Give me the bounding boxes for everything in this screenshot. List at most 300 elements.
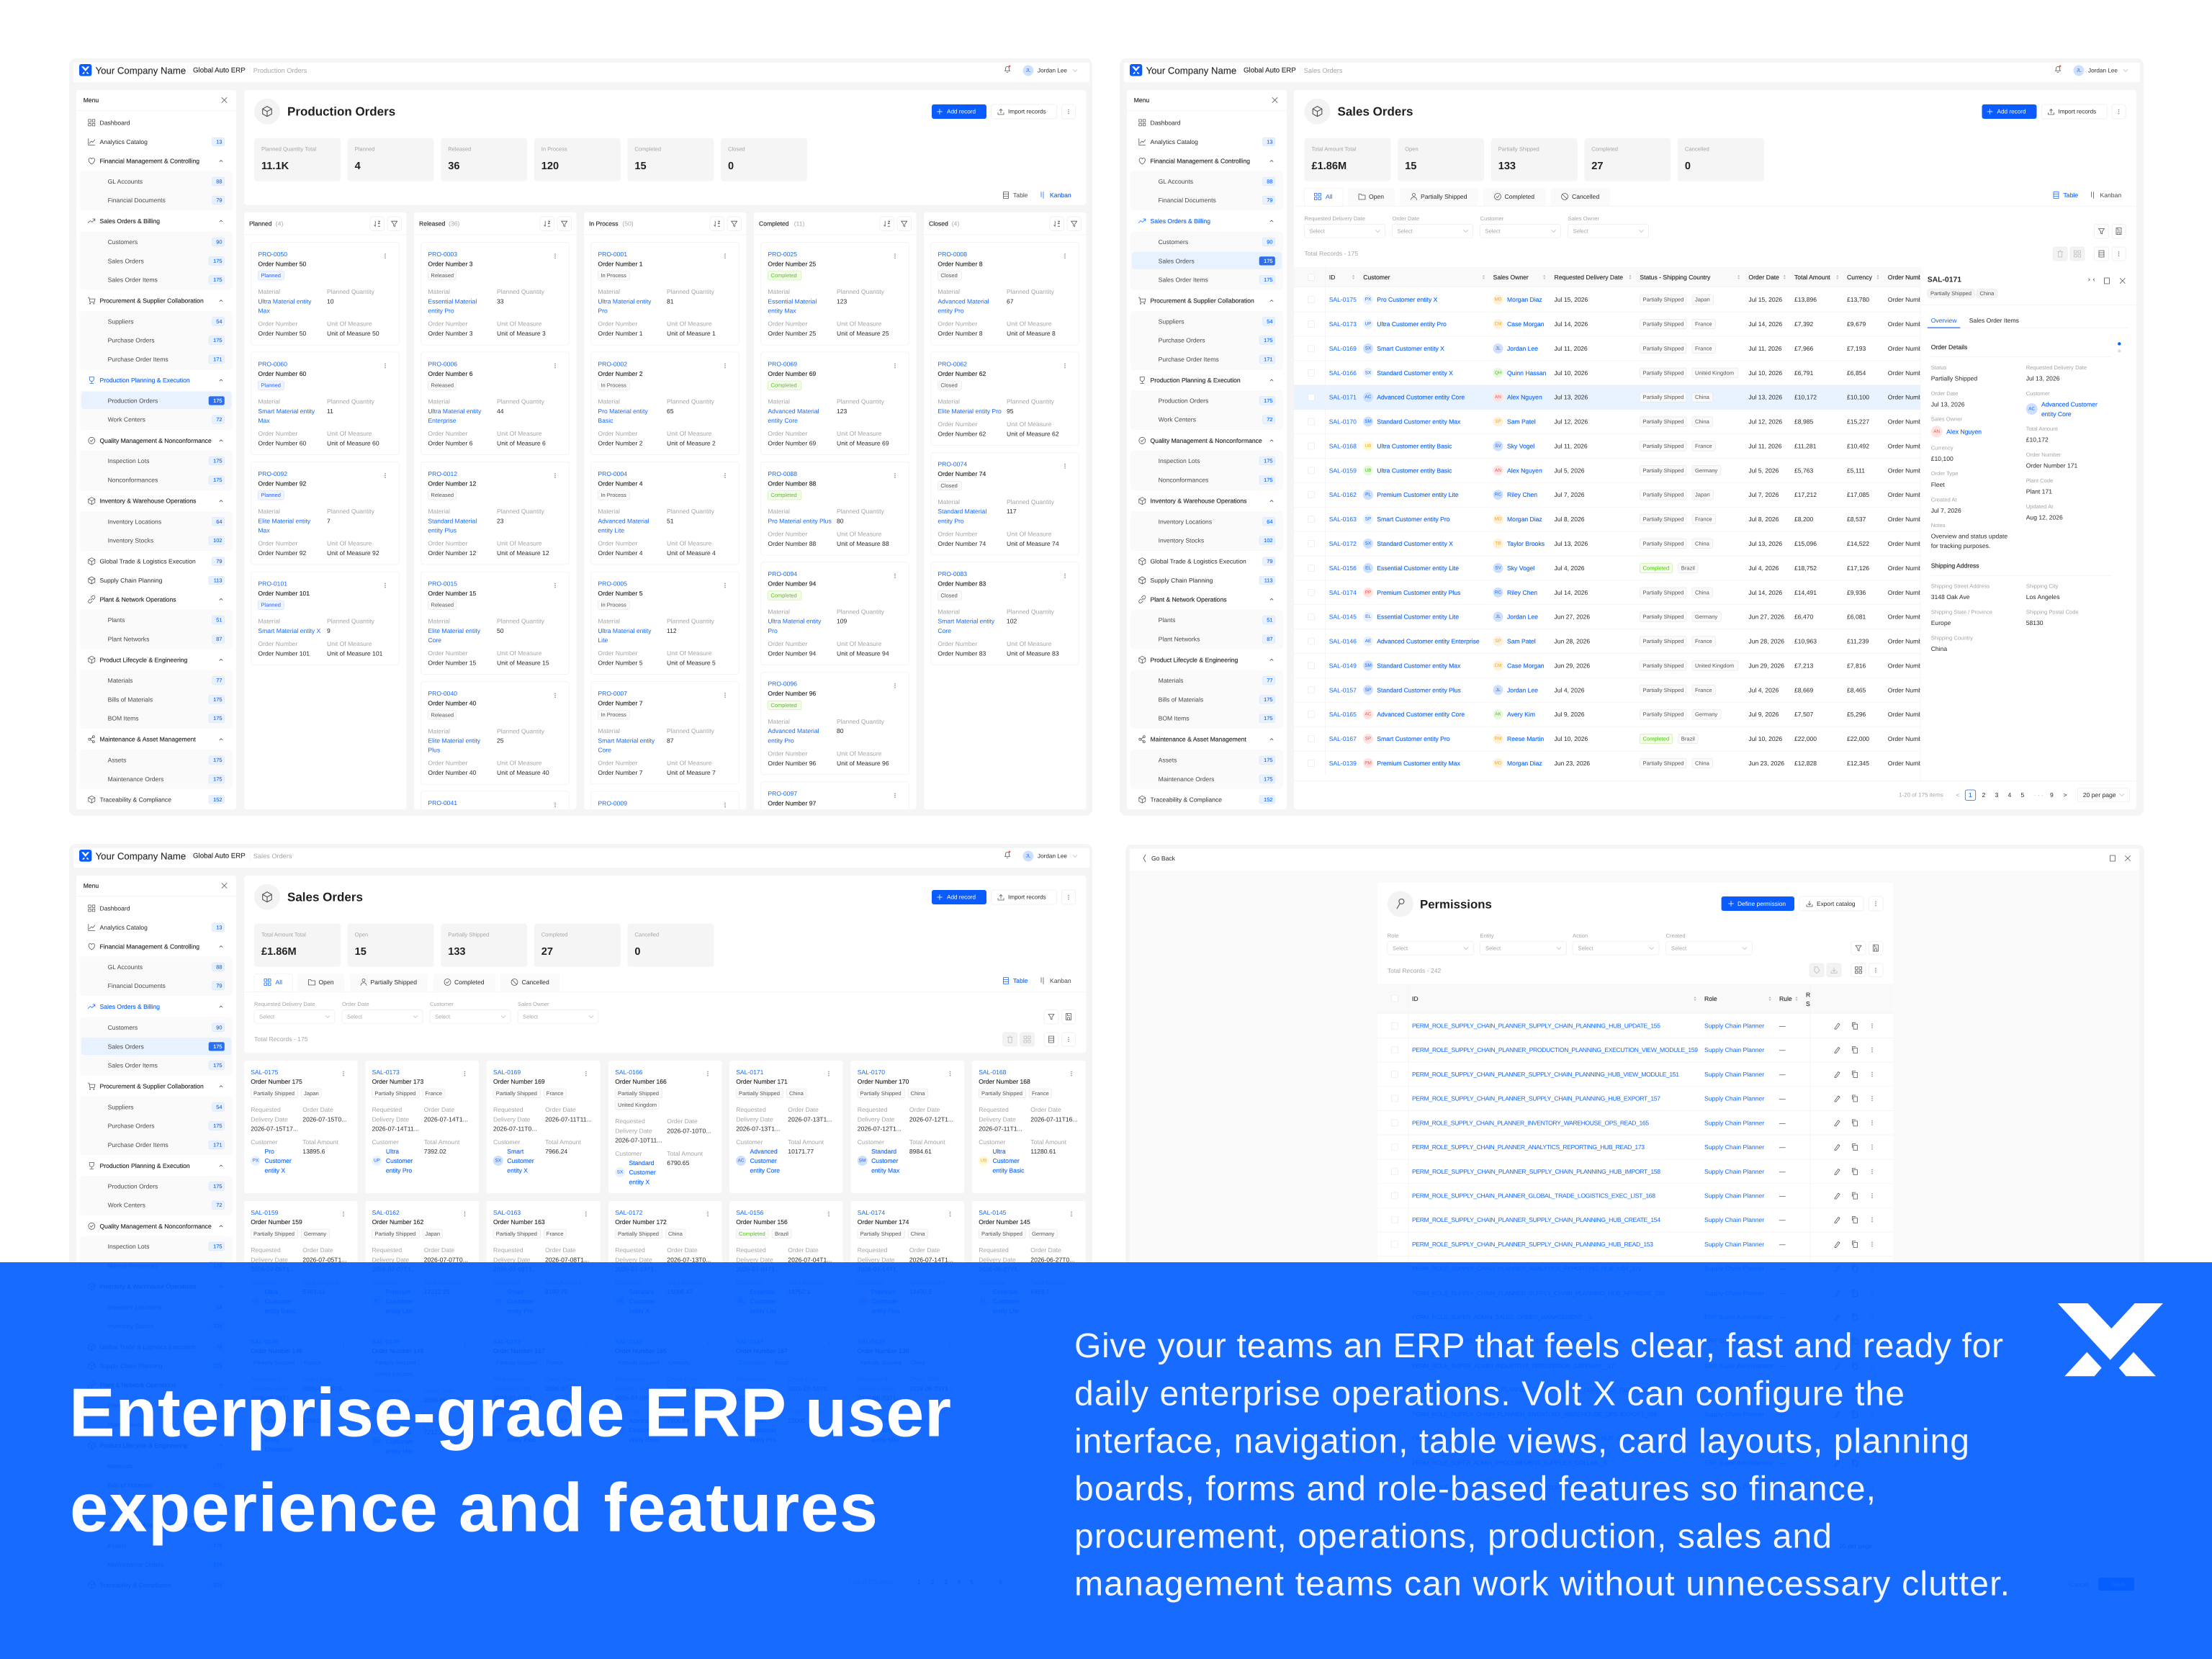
pagination: 5 [2020,791,2025,799]
table header: Customer [1363,274,1390,281]
row: SAL-0173 [1308,319,1940,329]
card: SAL-0173: entity Pro [386,1166,412,1174]
card: SAL-0173: Customer [386,1157,413,1164]
row: SAL-0166: Standard Customer entity X [1377,369,1453,377]
card: SAL-0168: Order Number 168 [979,1078,1030,1085]
card: PRO-0012: Planned Quantity [497,508,545,515]
KPI: Total Amount Total: Total Amount Total [261,931,306,938]
row: SAL-0145: Essential Customer entity Lite [1377,613,1459,621]
card: PRO-0004: In Process [601,492,626,498]
card: PRO-0083: Planned Quantity [1007,608,1055,615]
row: SAL-0174: Partially Shipped [1643,589,1683,595]
row: SAL-0163: Jul 8, 2026 [1554,516,1585,523]
card: SAL-0157: Order Date [545,1375,576,1382]
card: PRO-0083 [930,562,1079,665]
card: SAL-0172: SAL-0172 [615,1209,643,1216]
icon: key [1388,891,1413,917]
card: SAL-0166: 2026-07-10T11... [615,1137,662,1144]
row: SAL-0175: SAL-0175 [1329,296,1357,303]
table header: Status - Shipping Country [1640,274,1711,281]
pagination: · · · [2033,791,2044,799]
card: SAL-0162: Customer [386,1298,413,1305]
nav group: Inventory [80,1283,233,1336]
card: PRO-0088: Unit of Measure 88 [837,540,889,547]
card: PRO-0040: Order Number 40 [428,769,476,776]
row: permission 151: PERM_ROLE_SUPPLY_CHAIN_PLANNER_SUPPLY_CHAIN_PLANNING_HUB_VIEW_MODULE_151 [1412,1071,1679,1078]
row: permission 166: PERM_ROLE_SUPPLY_CHAIN_PLANNER_INVENTORY_WAREHOUSE_OPS_EXPORT_166 [1412,1411,1657,1418]
heading: Sales Orders [1338,105,1413,118]
top bar: Your Company Name [96,851,186,861]
card: PRO-0004: Advanced Material [598,517,649,524]
row: SAL-0166: SX [1365,370,1372,375]
card: SAL-0174: 14490.5 [909,1288,932,1295]
nav group: Sales Orders & Billing: 90 [216,238,222,245]
card: SAL-0162: Customer [372,1279,399,1286]
row: SAL-0156: Essential Customer entity Lite [1377,565,1459,572]
nav group: Procurement: Suppliers [108,1103,133,1110]
row: permission 166: Supply Chain Planner [1704,1411,1764,1418]
card: SAL-0170: Standard [871,1148,896,1155]
nav group: Quality: Inspection Lots [108,1243,149,1250]
card: SAL-0171: AC [738,1158,745,1164]
card: SAL-0174: Order Number 174 [858,1218,909,1226]
pagination [1721,1539,1877,1552]
card: PRO-0088: Unit Of Measure [837,530,882,537]
row: permission 8 [1412,1484,1873,1491]
actions [932,890,1076,904]
nav group: Product Lifecycle: 77 [216,677,222,684]
card: PRO-0001: Order Number [598,320,637,327]
row: SAL-0156: Brazil [1681,565,1695,571]
card: PRO-0092: Planned [261,492,281,498]
card: PRO-0060: Planned Quantity [327,398,375,405]
card: PRO-0005 [590,572,739,674]
row: permission 5 [1412,1460,1873,1467]
card: SAL-0149: entity Max [386,1447,415,1455]
nav: Analytics Catalog: Analytics Catalog [99,138,148,145]
card: PRO-0062: Closed [940,382,958,389]
pagination [1899,788,2129,802]
row: SAL-0157: Jordan Lee [1507,686,1538,693]
row: SAL-0167: Completed [1643,736,1669,742]
row: SAL-0170: Standard Customer entity Max [1377,418,1461,426]
view switch [1004,192,1071,199]
card: SAL-0165: Requested [615,1375,645,1382]
row: SAL-0149: Case Morgan [1507,662,1545,669]
row: permission 174 [1412,1434,1873,1442]
nav group: Financial Management: Financial Management & Controlling [99,943,199,950]
card: SAL-0173: Ultra [386,1148,399,1155]
KPI: In Process [534,138,621,181]
KPI: Cancelled [627,924,714,967]
record count and toolbar: Total Records - 175 [254,1035,308,1043]
card: SAL-0167: 2026-07-10T1... [736,1395,780,1402]
nav group: Procurement: Procurement & Supplier Collaboration [1151,297,1254,305]
card: PRO-0015: Order Number 15 [428,660,476,667]
row: SAL-0149: Partially Shipped [1643,662,1683,669]
filters: Order Date [1393,215,1419,222]
card: PRO-0012: Material [428,508,450,515]
card: PRO-0069: Planned Quantity [837,398,885,405]
card: SAL-0159: 2026-07-05T1... [302,1256,346,1263]
row: permission 166 [1412,1411,1873,1418]
row: permission 153: — [1779,1241,1786,1248]
row: permission 173 [1391,1143,1873,1151]
top bar [1124,63,2140,82]
card: PRO-0062: PRO-0062 [938,360,967,367]
card: SAL-0165: entity Core [629,1436,659,1443]
card: SAL-0159: 2026-07-05T1... [251,1266,295,1273]
row: SAL-0139: Partially Shipped [1643,760,1683,766]
row: SAL-0146: £11,239 [1847,638,1869,645]
row: SAL-0159: Partially Shipped [1643,467,1683,474]
row: SAL-0169: Jordan Lee [1507,345,1538,352]
row: SAL-0145: £6,470 [1794,613,1814,621]
row: SAL-0166: Jul 10, 2026 [1748,369,1782,377]
row: SAL-0168: Partially Shipped [1643,443,1683,449]
card: SAL-0170: Requested [858,1106,888,1113]
card: SAL-0156: Customer [736,1279,763,1286]
row: SAL-0167: Jul 10, 2026 [1554,735,1588,742]
row: permission 156: — [1779,1290,1786,1297]
app logo [79,64,91,76]
row: SAL-0174: SAL-0174 [1329,589,1357,596]
column header: Closed: Closed [929,220,948,228]
window frame [1125,845,2144,1602]
card: PRO-0096: Order Number 96 [768,760,816,767]
detail panel: SAL-0171: Status [1931,364,1946,371]
card: PRO-0001: Pro [598,307,608,314]
card: SAL-0156: Essential [750,1288,775,1295]
actions: Import records [1008,108,1046,115]
card: PRO-0008: Unit Of Measure [1007,320,1052,327]
nav group: Financial Management: 88 [216,963,222,971]
row: permission 156: PERM_ROLE_SUPPLY_CHAIN_PLANNER_SUPPLY_CHAIN_PLANNING_HUB_APPROVE_156 [1412,1290,1665,1297]
card: SAL-0172: China [668,1231,683,1237]
detail panel: SAL-0171: Shipping Postal Code [2026,609,2079,615]
row: SAL-0175: Japan [1695,297,1710,303]
row: SAL-0166: Quinn Hassan [1507,369,1547,377]
KPI: Completed: Completed [541,931,568,938]
card: SAL-0169: 2026-07-11T11... [545,1115,592,1123]
card: PRO-0101: Planned [261,602,281,608]
column header: Completed: Completed [759,220,789,228]
row: SAL-0173: UP [1365,322,1371,327]
card: SAL-0167: Completed [739,1359,765,1366]
card: SAL-0156 [729,1201,843,1322]
nav group: Procurement: 175 [213,337,222,343]
nav group: Maintenance: Maintenance & Asset Management [1151,736,1246,743]
nav group: Product Lifecycle [80,1442,233,1514]
card: PRO-0083: Order Number 83 [938,580,986,588]
card: PRO-0002 [590,352,739,455]
pagination: 5 [970,1578,974,1586]
card: SAL-0172: Total Amount [667,1279,703,1286]
card: PRO-0001: Ultra Material entity [598,297,652,305]
table header: Order Date [1748,274,1779,281]
card: PRO-0025: Order Number [768,320,807,327]
card: SAL-0166: Standard [629,1159,655,1166]
nav group: Financial Management: 79 [1267,197,1273,203]
row: SAL-0162: Partially Shipped [1643,492,1683,498]
row: permission 154: PERM_ROLE_SUPPLY_CHAIN_PLANNER_SUPPLY_CHAIN_PLANNING_HUB_CREATE_154 [1412,1216,1660,1223]
card: SAL-0168: UB [981,1158,986,1164]
nav: Traceability: Traceability & Compliance [99,796,171,803]
detail panel: SAL-0171: 3148 Oak Ave [1931,593,1970,601]
row: SAL-0171: AN [1495,395,1501,400]
pagination: 4 [2008,791,2012,799]
KPI: Cancelled: 0 [1685,161,1691,172]
detail panel: SAL-0171: SAL-0171 [1928,276,1961,284]
card: PRO-0001 [590,242,739,345]
card: SAL-0170: Partially Shipped [860,1090,902,1097]
card: SAL-0170: Customer [858,1138,884,1146]
card: PRO-0007: Order Number 7 [598,699,643,706]
row: SAL-0159: SAL-0159 [1329,467,1357,474]
card: PRO-0025: Material [768,288,790,295]
card: SAL-0162: SAL-0162 [372,1209,400,1216]
card: SAL-0163: Customer [507,1298,534,1305]
card: SAL-0173: Order Date [424,1106,454,1113]
detail panel: SAL-0171: £10,100 [1931,455,1954,462]
card: PRO-0062: Elite Material entity Pro [938,408,1002,415]
row: permission 157: PERM_ROLE_SUPPLY_CHAIN_PLANNER_SUPPLY_CHAIN_PLANNING_HUB_EXPORT_157 [1412,1094,1660,1102]
nav group: Quality: Quality Management & Nonconformance [99,1223,212,1230]
headline: Enterprise-grade ERP user [69,1375,951,1452]
row: SAL-0167: Brazil [1681,736,1695,742]
nav group: Plant: 87 [216,636,222,642]
row: SAL-0162: RC [1495,493,1501,498]
card: SAL-0157: Total Amount [545,1408,581,1415]
nav group: Procurement: Purchase Orders [1159,337,1205,344]
nav group: Production Planning (active): Production Planning & Execution [99,377,190,384]
card: SAL-0175: SAL-0175 [251,1069,279,1076]
card: SAL-0145: entity Lite [992,1307,1020,1314]
nav group: Financial Management: Financial Management & Controlling [99,157,199,164]
detail panel: SAL-0171: Order Details [1931,343,1967,351]
status tabs: Cancelled [1572,193,1599,200]
row: SAL-0170: Jul 12, 2026 [1748,418,1782,426]
record count and toolbar [1305,247,2126,261]
column panels [244,212,1086,809]
card: SAL-0171: Customer [736,1138,763,1146]
row: SAL-0163: Morgan Diaz [1507,516,1542,523]
row: permission 172: — [1779,1265,1786,1272]
card: PRO-0003: Planned Quantity [497,288,545,295]
card: SAL-0172: SX [617,1299,624,1303]
detail panel: SAL-0171: China [1980,290,1995,297]
nav group: Plant [80,595,233,649]
table header: Requested Delivery Date [1554,274,1623,281]
row: SAL-0145: £6,081 [1847,613,1866,621]
row: SAL-0174: Jul 14, 2026 [1554,589,1588,596]
card: SAL-0172: Delivery Date [615,1256,652,1263]
row: permission 154: — [1779,1216,1786,1223]
body copy: interface, navigation, table views, card layouts, planning [1074,1422,1969,1460]
pagination: < [1956,791,1960,799]
nav: Supply Chain Planning [89,576,225,585]
KPI: Total Amount Total: £1.86M [1312,161,1346,172]
row: SAL-0149: SM [1364,663,1372,668]
sidebar navigation: Menu [1134,96,1149,104]
column header: Completed: (11) [794,220,804,228]
card: SAL-0171 [729,1061,843,1193]
nav group: Production Planning: Production Planning & Execution [99,1162,190,1169]
filters [254,1001,1076,1024]
card: SAL-0168: France [1032,1090,1049,1097]
card: SAL-0172 [608,1201,722,1322]
card: PRO-0015: Released [431,602,454,608]
card: SAL-0170: Delivery Date [858,1115,895,1123]
card: PRO-0012: Standard Material [428,517,477,524]
row: SAL-0171: SAL-0171 [1329,394,1357,401]
nav group: Production Planning (active): 175 [213,397,222,404]
card: SAL-0146: entity [265,1436,280,1443]
row: SAL-0146 [1308,637,1940,647]
card: PRO-0074: entity Pro [938,517,964,524]
page header panel [244,90,1086,204]
pagination: 1 [1800,1542,1804,1550]
detail panel: SAL-0171: Shipping Address [1931,562,1979,570]
kanban columns [244,212,1086,809]
row: SAL-0146: £10,963 [1794,638,1817,645]
column header: Planned: (4) [276,220,283,228]
nav group: Production Planning: Production Orders [108,1182,158,1190]
row: SAL-0167 [1308,734,1940,744]
nav group: Plant: 51 [216,616,222,624]
row: SAL-0172: £14,522 [1847,540,1869,547]
card: SAL-0173: Partially Shipped [374,1090,415,1097]
card: SAL-0167: Customer [750,1426,777,1434]
body copy: daily enterprise operations. Volt X can configure the [1074,1375,1905,1413]
row: SAL-0163: Order Number 163 [1888,516,1940,523]
card: SAL-0162: Order Number 162 [372,1218,423,1226]
card: PRO-0074: PRO-0074 [938,461,967,468]
row: SAL-0172: Taylor Brooks [1507,540,1545,547]
status tabs: Partially Shipped [1421,193,1467,200]
row: SAL-0166: Partially Shipped [1643,369,1683,376]
card: SAL-0169: SAL-0169 [493,1069,521,1076]
row: SAL-0167: SAL-0167 [1329,735,1357,742]
row: SAL-0175: £13,780 [1847,296,1869,303]
row: SAL-0159: £5,763 [1794,467,1814,474]
table header: Role [1704,995,1717,1002]
detail panel: SAL-0171: Fleet [1931,481,1945,488]
nav group: Production Planning (active): Work Centers [108,416,145,423]
detail panel: SAL-0171: Customer [2026,390,2050,397]
card: PRO-0005: PRO-0005 [598,580,627,587]
top bar: Global Auto ERP [193,66,246,75]
card: SAL-0167: SAL-0167 [736,1338,764,1345]
nav group: Maintenance: 175 [1264,757,1273,763]
row: SAL-0163: SP [1365,517,1371,522]
table header: Order Number [1888,274,1928,281]
card: SAL-0162: Partially Shipped [374,1231,415,1237]
row: SAL-0162: Order Number 162 [1888,491,1940,498]
card: PRO-0007: Material [598,727,620,734]
row: SAL-0145: Jun 27, 2026 [1554,613,1590,621]
card: SAL-0165: 2026-07-09T1... [667,1385,711,1392]
card: PRO-0092: Unit Of Measure [327,540,372,547]
nav group: Financial Management [80,943,233,996]
row: SAL-0170: £8,985 [1794,418,1814,426]
nav group: Sales Orders & Billing (active): Sales Orders [108,1043,144,1050]
card: SAL-0145: Germany [1032,1231,1054,1237]
card: PRO-0060: Material [258,398,280,405]
card: SAL-0145: Requested [979,1246,1009,1254]
card: PRO-0025: Essential Material [768,297,817,305]
row: SAL-0172: £15,096 [1794,540,1817,547]
nav group: Quality: Nonconformances [1159,477,1208,484]
card: PRO-0005: Lite [598,637,608,644]
blue banner [0,1262,2212,1659]
KPI: Open [348,924,434,967]
nav group: Product Lifecycle: 77 [216,1463,222,1469]
KPI: Open: Open [1405,145,1419,152]
card: PRO-0006: Enterprise [428,417,457,424]
row: SAL-0165: Order Number 165 [1888,711,1940,718]
card: SAL-0175: Customer [251,1138,278,1146]
detail controls [2089,278,2125,284]
row: SAL-0159: Ultra Customer entity Basic [1377,467,1452,474]
card: SAL-0175: Partially Shipped [253,1090,295,1097]
row: SAL-0167: £22,000 [1794,735,1817,742]
card: SAL-0163: 2026-07-08T1... [493,1266,537,1273]
card: PRO-0004: Order Number [598,540,637,547]
card: SAL-0156: Requested [736,1246,766,1254]
nav: Analytics Catalog: 13 [1267,138,1273,145]
card: PRO-0005: 112 [667,627,677,634]
card: PRO-0060: Order Number 60 [258,370,306,377]
detail panel: SAL-0171: Created At [1931,497,1957,503]
detail panel: SAL-0171: Los Angeles [2026,593,2060,601]
row: SAL-0175: £13,896 [1794,296,1817,303]
nav: Analytics Catalog [89,138,225,146]
card: SAL-0170: entity Max [871,1166,900,1174]
row: SAL-0157: Partially Shipped [1643,687,1683,693]
top bar: Global Auto ERP [1244,66,1296,75]
pagination: 20 per page [2083,791,2116,799]
nav group: Sales Orders & Billing (active): 90 [1267,238,1273,245]
row: SAL-0170: SAL-0170 [1329,418,1357,426]
notifications and user [1005,65,1077,76]
row: SAL-0172: SX [1365,541,1372,546]
card: SAL-0157: Standard [507,1417,532,1424]
detail panel: SAL-0171: Sales Owner [1931,416,1963,423]
row: SAL-0171: Alex Nguyen [1507,394,1542,401]
card: PRO-0005: Order Number 5 [598,660,643,667]
row: SAL-0173: £9,679 [1847,320,1866,328]
row: SAL-0157: Standard Customer entity Plus [1377,686,1461,693]
row: SAL-0174: Jul 14, 2026 [1748,589,1782,596]
nav group: Financial Management: 88 [216,179,222,184]
card: PRO-0008: 67 [1007,297,1014,305]
card: SAL-0149: 2026-06-29T0... [424,1396,468,1403]
card: PRO-0088: PRO-0088 [768,470,797,477]
nav: Traceability: 152 [213,1582,222,1588]
nav group: Product Lifecycle: 175 [213,715,222,721]
detail panel: SAL-0171: China [1931,645,1947,652]
pagination: 2 [1982,791,1986,799]
card: SAL-0145: EL [981,1299,986,1303]
nav group: Product Lifecycle [80,656,233,729]
nav group: Production Planning: 72 [216,1202,222,1208]
card: PRO-0004 [590,462,739,565]
window frame [1120,58,2144,816]
card: PRO-0083: Order Number [938,640,977,647]
card: SAL-0170 [851,1061,964,1193]
row: permission 165: Supply Chain Planner [1704,1119,1764,1126]
